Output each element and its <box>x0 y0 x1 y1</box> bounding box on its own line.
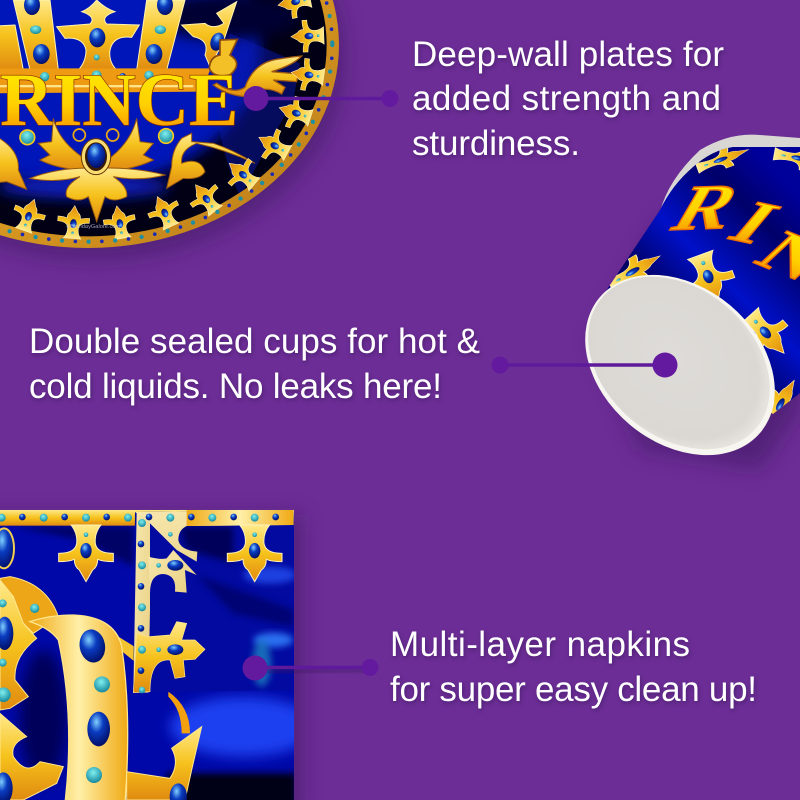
text: plates <box>412 35 724 163</box>
panel: cup <box>585 134 800 474</box>
fold band and cross <box>135 510 294 562</box>
text: cups <box>29 322 480 406</box>
plate watermark: ©BirthdayGalore.com <box>66 223 120 230</box>
cup crosses <box>696 148 750 174</box>
cup rim <box>660 135 800 215</box>
text: napkins: for super easy clean up! <box>390 670 757 709</box>
cup body <box>600 147 800 414</box>
crown bars on napkin <box>0 577 58 633</box>
connector line <box>500 363 665 367</box>
cup letters: R <box>659 171 755 245</box>
cup letters: I <box>715 189 794 256</box>
top gold band <box>0 510 294 526</box>
text: cups: cold liquids. No leaks here! <box>29 367 442 406</box>
side swirls <box>167 133 255 188</box>
dot: text end <box>492 356 508 374</box>
cup shadow <box>592 150 800 470</box>
text: plates: sturdiness. <box>412 124 580 163</box>
rim beads <box>0 0 332 242</box>
callout: napkins <box>242 625 757 709</box>
plate shadow <box>0 0 346 261</box>
plate rim <box>0 0 339 248</box>
text: plates: added strength and <box>412 79 721 118</box>
callout shadow <box>500 366 668 370</box>
text: napkins: Multi-layer napkins <box>390 625 690 664</box>
callout shadow <box>256 670 372 671</box>
cup artwork <box>610 147 800 414</box>
napkin shadow <box>0 515 302 800</box>
panel: plate <box>0 0 346 267</box>
plate artwork <box>0 0 339 267</box>
border crosses <box>9 0 326 241</box>
cup base lip <box>549 238 800 492</box>
cup base <box>554 241 800 485</box>
callout: cups <box>29 322 678 406</box>
dot: napkin <box>242 656 268 680</box>
napkin cloth <box>0 510 294 800</box>
napkin artwork <box>0 510 317 800</box>
napkin crosses <box>59 525 113 582</box>
right flourish <box>213 56 302 97</box>
dot: plate <box>244 86 268 111</box>
napkin beads <box>0 514 279 693</box>
text: plates: Deep-wall plates for <box>412 35 724 74</box>
connector line <box>255 666 370 669</box>
callout: plates <box>244 35 724 163</box>
centre ornament <box>20 118 173 222</box>
text: cups: Double sealed cups for hot & <box>29 322 480 361</box>
dot: text end <box>382 90 398 107</box>
crown on plate <box>0 0 237 93</box>
plate centre <box>0 0 327 236</box>
dot: cup <box>652 352 678 378</box>
crown gems <box>24 0 40 15</box>
cup letters <box>668 186 800 280</box>
connector line <box>256 97 390 100</box>
callout shadow <box>258 98 392 104</box>
napkin gems <box>80 629 106 662</box>
dot: text end <box>362 659 378 676</box>
panel: napkin <box>0 510 317 800</box>
text: napkins <box>390 625 757 709</box>
napkin fold <box>133 510 294 693</box>
